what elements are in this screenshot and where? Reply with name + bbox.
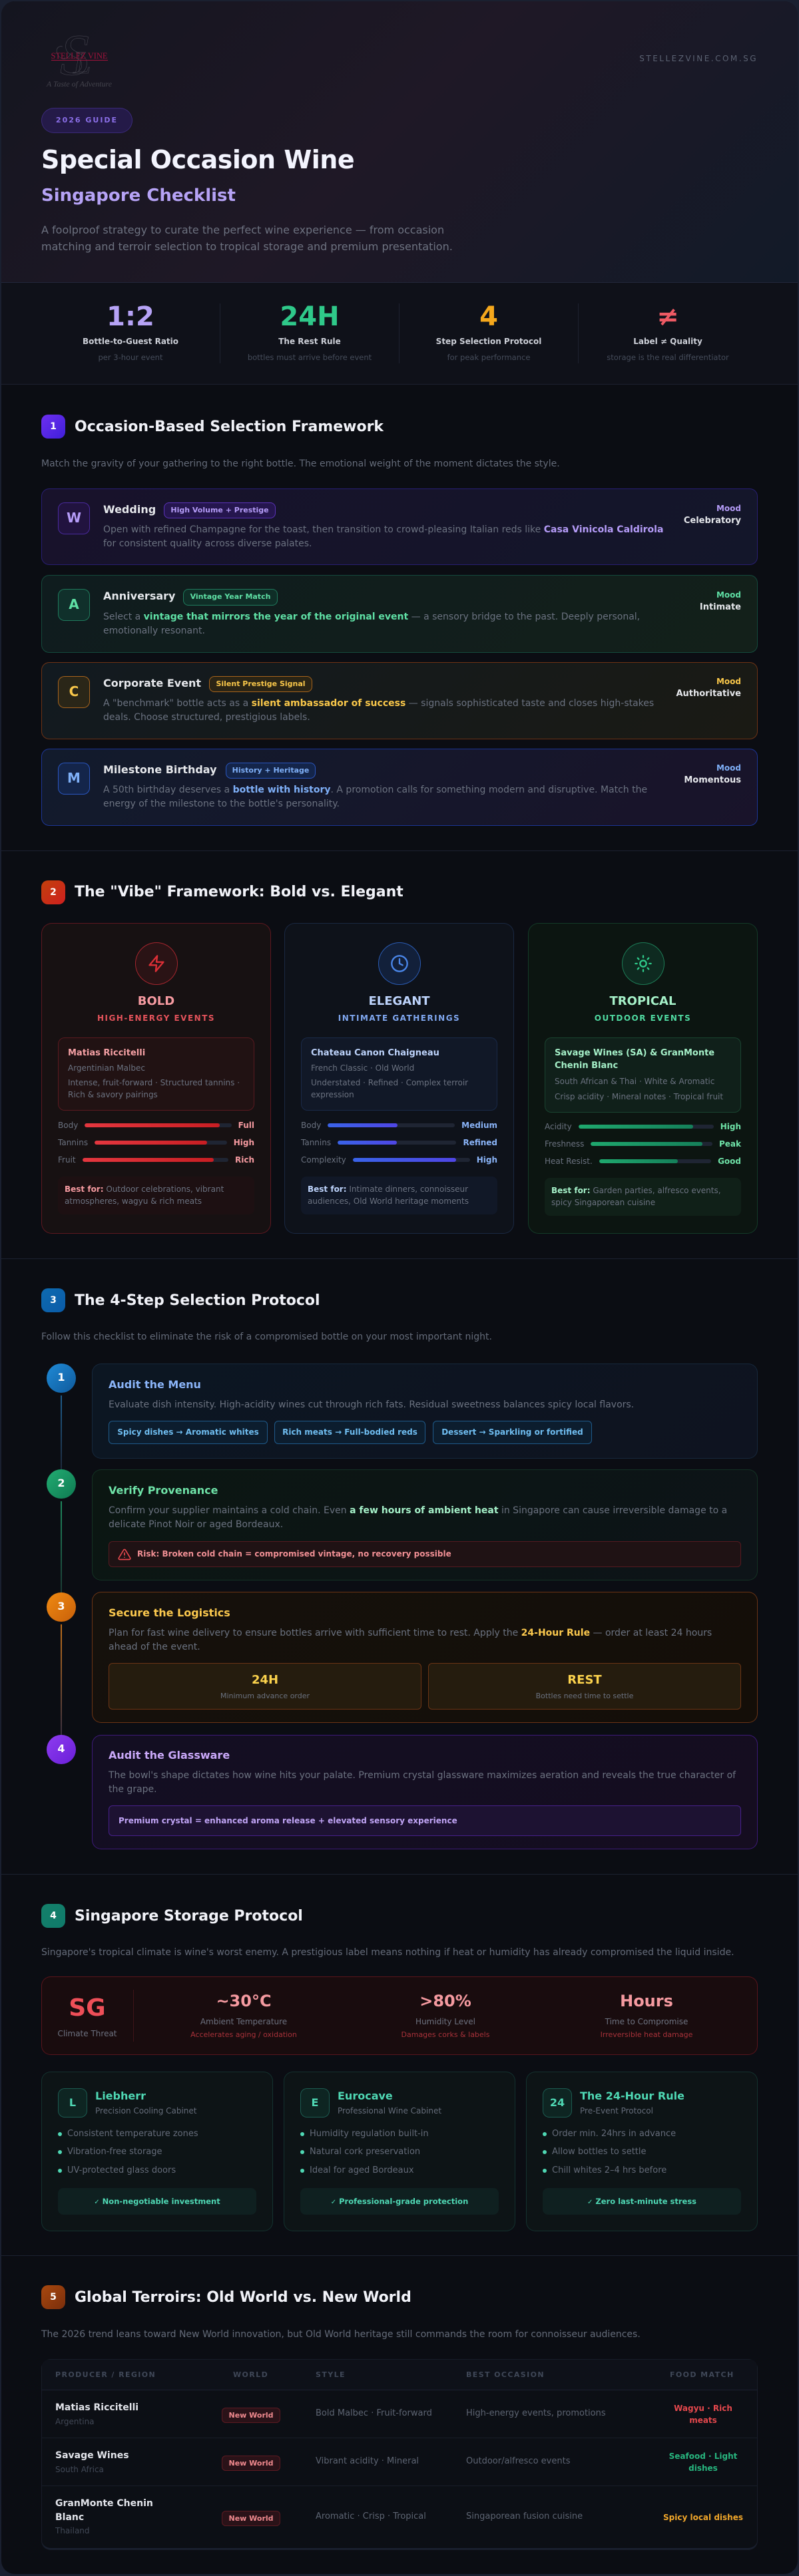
threat: temperature: Ambient Temperature: [200, 2017, 287, 2026]
meter: tannins: Refined: [463, 1138, 497, 1147]
glassware callout: [109, 1805, 741, 1836]
step 2: verify provenance: Verify Provenance: [109, 1484, 218, 1497]
section 5 badge: 5: [50, 2292, 57, 2302]
meter: complexity: Complexity: [301, 1155, 346, 1165]
meter: fruit: Rich: [235, 1155, 254, 1165]
threat: time: [601, 1992, 692, 2039]
best for: Best for: Garden parties, alfresco events,: [551, 1186, 721, 1195]
mood: Celebratory: [684, 516, 741, 526]
stat box: rest: [428, 1663, 741, 1710]
icon: L: [58, 2088, 87, 2117]
title: Special Occasion Wine: [41, 145, 354, 174]
step 3: secure the logistics: Plan for fast wine delivery to ensure bottles arrive with sufficient time to rest. Apply the 24-Hour Rule — order at least 24 hours: [109, 1628, 712, 1638]
table header: FOOD MATCH: [670, 2370, 734, 2379]
mood: Intimate: [700, 602, 741, 612]
row: Matias Riccitelli: Wagyu · Rich: [674, 2404, 732, 2413]
stat box: 24H: 24H: [252, 1673, 278, 1687]
description: deals. Choose structured, prestigious labels.: [103, 712, 310, 723]
storage card: 24-hour rule: Pre-Event Protocol: [580, 2106, 653, 2116]
storage card: 24-hour rule: [526, 2072, 758, 2231]
best for: spicy Singaporean cuisine: [551, 1198, 655, 1207]
section 2 heading: The "Vibe" Framework: Bold vs. Elegant: [75, 884, 403, 900]
table header: BEST OCCASION: [466, 2370, 545, 2379]
storage card: 24-hour rule: Chill whites 2–4 hrs before: [552, 2165, 666, 2175]
storage card: liebherr: Consistent temperature zones: [67, 2129, 198, 2139]
climate label: Climate Threat: [57, 2029, 117, 2038]
step 1: audit the menu: Evaluate dish intensity. High-acidity wines cut through rich fats. Residual sweetness balances spicy local flavors.: [109, 1399, 634, 1410]
description: A 50th birthday deserves a bottle with history. A promotion calls for something modern and disruptive. Match the: [103, 785, 647, 795]
occasion card: milestone: [41, 749, 758, 826]
meter: tannins: Tannins: [58, 1138, 88, 1147]
stat: rest rule: bottles must arrive before event: [248, 353, 372, 362]
stat: ratio: [83, 301, 178, 362]
description: matching and terroir selection to tropical storage and premium presentation.: [41, 240, 453, 253]
producer box: French Classic · Old World: [311, 1063, 414, 1073]
card title: Corporate Event: [103, 677, 201, 689]
best for: atmospheres, wagyu & rich meats: [65, 1196, 202, 1206]
icon: clock: [378, 942, 421, 985]
stats bar: [1, 282, 798, 385]
threat: humidity: [401, 1992, 489, 2039]
brand logo: A Taste of Adventure: [46, 79, 113, 89]
section 2 badge: [41, 880, 65, 904]
mood: [676, 677, 741, 699]
stat: label vs quality: storage is the real differentiator: [607, 353, 729, 362]
step 1: audit the menu: Audit the Menu: [109, 1378, 201, 1391]
meter: freshness: Peak: [719, 1139, 741, 1149]
description: Select a vintage that mirrors the year of the original event — a sensory bridge to the past. Deeply personal,: [103, 612, 640, 622]
row: GranMonte Chenin Blanc: Blanc: [55, 2512, 84, 2523]
producer box: Understated · Refined · Complex terroir: [311, 1078, 468, 1087]
climate label: [57, 1994, 117, 2038]
storage card: eurocave: Natural cork preservation: [310, 2147, 420, 2157]
producer box: Chenin Blanc: [555, 1061, 618, 1071]
mood: Mood: [716, 763, 741, 773]
row: GranMonte Chenin Blanc: Thailand: [55, 2526, 90, 2535]
meter: tannins: High: [234, 1138, 254, 1147]
occasion card: corporate: [41, 662, 758, 739]
vibe subtitle: HIGH-ENERGY EVENTS: [97, 1013, 215, 1023]
producer box: Crisp acidity · Mineral notes · Tropical fruit: [555, 1092, 723, 1101]
icon: M: M: [67, 770, 81, 786]
meter: freshness: Freshness: [545, 1139, 584, 1149]
best for: [58, 1177, 254, 1214]
row: Savage Wines: New World: [228, 2459, 274, 2468]
description: [103, 785, 647, 809]
threat: temperature: [190, 1992, 297, 2039]
table header: [41, 2359, 758, 2390]
section 4 badge: [41, 1904, 65, 1928]
icon: W: W: [67, 510, 81, 526]
section 3 badge: [41, 1288, 65, 1312]
pairing chip: Spicy dishes → Aromatic whites: [117, 1427, 259, 1437]
storage card: 24-hour rule: Order min. 24hrs in advance: [552, 2129, 676, 2139]
card footer: [543, 2188, 741, 2215]
meter: tannins: [301, 1138, 497, 1147]
section 4 badge: 4: [50, 1911, 57, 1921]
guide pill: 2026 GUIDE: [56, 116, 118, 124]
climate threat panel: [41, 1976, 758, 2055]
row: GranMonte Chenin Blanc: GranMonte Chenin: [55, 2498, 153, 2509]
storage card: eurocave: Professional Wine Cabinet: [338, 2106, 441, 2116]
description: [103, 524, 663, 549]
step 4: audit the glassware: Audit the Glassware: [109, 1749, 230, 1761]
row: Savage Wines: South Africa: [55, 2465, 104, 2474]
meter: heat resist: [545, 1157, 741, 1166]
card title: Wedding: [103, 503, 156, 516]
stat: step protocol: [436, 301, 541, 362]
card title: Anniversary: [103, 590, 175, 602]
storage card: liebherr: Precision Cooling Cabinet: [95, 2106, 197, 2116]
card footer: ✓ Professional-grade protection: [331, 2197, 468, 2206]
brand logo: STELLEZ VINE: [51, 51, 108, 61]
producer box: Savage Wines (SA) & GranMonte: [555, 1048, 714, 1058]
icon: lightning: [135, 942, 178, 985]
producer box: Rich & savory pairings: [68, 1090, 158, 1099]
meter: acidity: [545, 1122, 741, 1131]
table header: STYLE: [316, 2370, 346, 2379]
best for: audiences, Old World heritage moments: [308, 1196, 469, 1206]
meter: heat resist: Heat Resist.: [545, 1157, 593, 1166]
producer box: Chateau Canon Chaigneau: [311, 1048, 439, 1058]
icon: A: [58, 589, 90, 621]
row: Matias Riccitelli: Matias Riccitelli: [55, 2402, 138, 2413]
climate label: SG: [69, 1994, 106, 2022]
risk callout: Risk: Broken cold chain = compromised vintage, no recovery possible: [137, 1549, 451, 1559]
description: [103, 698, 654, 723]
step 2: verify provenance: delicate Pinot Noir or aged Bordeaux.: [109, 1519, 283, 1530]
stat: rest rule: 24H: [280, 301, 340, 332]
stat: label vs quality: ≠: [657, 301, 679, 332]
guide pill: [41, 108, 133, 133]
terroir table: [41, 2359, 758, 2550]
mood: [684, 763, 741, 785]
risk callout: [109, 1541, 741, 1567]
step marker 4: [47, 1735, 76, 1764]
description: Open with refined Champagne for the toast, then transition to crowd-pleasing Italian reds like Casa Vinicola Caldirola: [103, 524, 663, 535]
mood: [684, 504, 741, 526]
producer box: Matias Riccitelli: [68, 1048, 145, 1058]
step marker 3: 3: [57, 1600, 65, 1612]
mood: Mood: [716, 590, 741, 600]
icon: L: L: [69, 2096, 76, 2109]
section 5 intro: The 2026 trend leans toward New World innovation, but Old World heritage still commands the room for connoisseur audiences.: [41, 2329, 641, 2340]
step marker 2: [47, 1469, 76, 1499]
storage card: 24-hour rule: The 24-Hour Rule: [580, 2090, 684, 2102]
step 3: secure the logistics: [92, 1592, 758, 1723]
meter: body: Body: [301, 1121, 321, 1130]
pairing chip: [274, 1421, 425, 1444]
pairing chip: [109, 1421, 268, 1444]
meter: fruit: Fruit: [58, 1155, 76, 1165]
producer box: South African & Thai · White & Aromatic: [555, 1077, 714, 1086]
best for: Best for: Outdoor celebrations, vibrant: [65, 1185, 224, 1194]
storage card: liebherr: Vibration-free storage: [67, 2147, 162, 2157]
row: Matias Riccitelli: Argentina: [55, 2417, 95, 2426]
description: [41, 224, 453, 253]
stat box: rest: Bottles need time to settle: [536, 1692, 633, 1700]
tag: [226, 763, 316, 779]
producer box: Intense, fruit-forward · Structured tannins ·: [68, 1078, 240, 1087]
glassware callout: Premium crystal = enhanced aroma release + elevated sensory experience: [119, 1816, 457, 1825]
threat: time: Irreversible heat damage: [601, 2030, 692, 2039]
icon: 24: 24: [550, 2096, 565, 2109]
storage card: liebherr: Liebherr: [95, 2090, 146, 2102]
best for: [545, 1178, 741, 1216]
section 1 intro: Match the gravity of your gathering to the right bottle. The emotional weight of the moment dictates the style.: [41, 459, 560, 469]
card footer: [58, 2188, 256, 2215]
row: Matias Riccitelli: meats: [689, 2416, 717, 2425]
threat: humidity: Humidity Level: [415, 2017, 475, 2026]
row: GranMonte Chenin Blanc: Spicy local dishes: [663, 2513, 743, 2522]
producer box: Argentinian Malbec: [68, 1063, 145, 1073]
tag: [183, 589, 278, 606]
vibe name: TROPICAL: [610, 994, 676, 1008]
occasion card: wedding: [41, 488, 758, 565]
step marker 4: 4: [57, 1742, 65, 1755]
icon: 24: [543, 2088, 572, 2117]
stat: label vs quality: Label ≠ Quality: [633, 337, 702, 346]
row: GranMonte Chenin Blanc: New World: [228, 2514, 274, 2523]
tag: High Volume + Prestige: [170, 506, 269, 514]
step 2: verify provenance: [92, 1469, 758, 1580]
producer box: expression: [311, 1090, 354, 1099]
meter: complexity: High: [477, 1155, 497, 1165]
description: energy of the milestone to the bottle's personality.: [103, 799, 340, 809]
stat: rest rule: The Rest Rule: [278, 337, 341, 346]
vibe subtitle: OUTDOOR EVENTS: [595, 1013, 691, 1023]
row: Savage Wines: [42, 2450, 757, 2486]
storage card: eurocave: [284, 2072, 515, 2231]
icon: W: [58, 502, 90, 534]
step 3: secure the logistics: ahead of the event.: [109, 1642, 200, 1652]
row: GranMonte Chenin Blanc: Aromatic · Crisp · Tropical: [316, 2511, 426, 2521]
section 1 badge: 1: [50, 421, 57, 432]
icon: C: C: [69, 683, 79, 699]
icon: E: [300, 2088, 330, 2117]
brand logo: L: [73, 45, 91, 81]
header banner: [1, 1, 798, 282]
section 3 badge: 3: [50, 1295, 57, 1306]
row: Savage Wines: Seafood · Light: [669, 2452, 737, 2461]
row: Savage Wines: dishes: [688, 2464, 718, 2473]
icon: M: [58, 763, 90, 795]
description: for consistent quality across diverse palates.: [103, 538, 312, 549]
meter: body: Medium: [461, 1121, 497, 1130]
step marker 1: [47, 1364, 76, 1393]
subtitle: Singapore Checklist: [41, 186, 236, 206]
mood: Authoritative: [676, 689, 741, 699]
meter: freshness: [545, 1139, 742, 1149]
stat: label vs quality: [607, 301, 729, 362]
row: GranMonte Chenin Blanc: [55, 2498, 743, 2535]
tag: Vintage Year Match: [190, 592, 270, 601]
meter: tannins: Tannins: [301, 1138, 331, 1147]
stat: ratio: Bottle-to-Guest Ratio: [83, 337, 178, 346]
tag: [209, 676, 312, 692]
stat: ratio: 1:2: [107, 301, 154, 332]
section 5 heading: Global Terroirs: Old World vs. New World: [75, 2289, 411, 2306]
storage card: eurocave: Eurocave: [338, 2090, 393, 2102]
vibe card: elegant: [284, 923, 514, 1234]
row: Savage Wines: Savage Wines: [55, 2450, 129, 2461]
stat: step protocol: 4: [479, 301, 498, 332]
description: A foolproof strategy to curate the perfect wine experience — from occasion: [41, 224, 444, 236]
storage card: eurocave: Ideal for aged Bordeaux: [310, 2165, 414, 2175]
card footer: ✓ Non-negotiable investment: [94, 2197, 220, 2206]
card footer: [300, 2188, 499, 2215]
section 5 badge: [41, 2285, 65, 2309]
step 4: audit the glassware: [92, 1735, 758, 1849]
mood: Mood: [716, 677, 741, 686]
vibe card: tropical: [528, 923, 758, 1234]
description: A "benchmark" bottle acts as a silent ambassador of success — signals sophisticated taste and closes high-stakes: [103, 698, 654, 709]
brand logo: [46, 27, 113, 89]
producer box: [58, 1037, 254, 1111]
meter: tannins: [57, 1138, 254, 1147]
meter: acidity: High: [720, 1122, 741, 1131]
icon: C: [58, 676, 90, 708]
step 1: audit the menu: [92, 1364, 758, 1459]
step 3: secure the logistics: Secure the Logistics: [109, 1606, 230, 1619]
meter: body: [301, 1121, 497, 1130]
section 4 heading: Singapore Storage Protocol: [75, 1908, 303, 1925]
meter: fruit: [58, 1155, 254, 1165]
stat: step protocol: Step Selection Protocol: [436, 337, 541, 346]
meter: acidity: Acidity: [545, 1122, 572, 1131]
storage card: liebherr: [41, 2072, 273, 2231]
stat box: rest: REST: [567, 1673, 602, 1687]
row: Matias Riccitelli: New World: [228, 2411, 274, 2420]
tag: History + Heritage: [232, 766, 309, 775]
icon: warning: [118, 1549, 131, 1560]
step marker 3: [47, 1592, 76, 1622]
producer box: [301, 1037, 497, 1111]
step 4: audit the glassware: the grape.: [109, 1784, 157, 1795]
section 1 badge: [41, 415, 65, 439]
threat: temperature: Accelerates aging / oxidation: [190, 2030, 297, 2039]
website: STELLEZVINE.COM.SG: [639, 54, 758, 63]
meter: heat resist: Good: [718, 1157, 741, 1166]
mood: Momentous: [684, 775, 741, 785]
section 3 heading: The 4-Step Selection Protocol: [75, 1292, 320, 1309]
occasion card: anniversary: [41, 575, 758, 653]
section 4 intro: Singapore's tropical climate is wine's worst enemy. A prestigious label means nothing if heat or humidity has already compromised the liquid inside.: [41, 1947, 734, 1958]
stat: step protocol: for peak performance: [447, 353, 530, 362]
storage card: liebherr: UV-protected glass doors: [67, 2165, 176, 2175]
step marker 2: 2: [57, 1477, 65, 1489]
threat: time: Time to Compromise: [605, 2017, 688, 2026]
pairing chip: Rich meats → Full-bodied reds: [282, 1427, 417, 1437]
threat: time: Hours: [620, 1992, 673, 2010]
card title: Milestone Birthday: [103, 763, 217, 776]
stat: rest rule: [248, 301, 372, 362]
step marker 1: 1: [57, 1371, 65, 1383]
vibe card: bold: [41, 923, 271, 1234]
tag: Silent Prestige Signal: [216, 679, 306, 688]
step 2: verify provenance: Confirm your supplier maintains a cold chain. Even a few hours of ambient heat in Singapore can cause irreversible damage to a: [109, 1505, 727, 1516]
description: [103, 612, 640, 636]
pairing chip: Dessert → Sparkling or fortified: [441, 1427, 583, 1437]
description: emotionally resonant.: [103, 626, 205, 636]
section 1 heading: Occasion-Based Selection Framework: [75, 419, 384, 435]
meter: body: Full: [238, 1121, 254, 1130]
producer box: [545, 1037, 741, 1113]
section 2 badge: 2: [50, 887, 57, 898]
icon: sun: [622, 942, 665, 985]
best for: Best for: Intimate dinners, connoisseur: [308, 1185, 468, 1194]
row: Matias Riccitelli: High-energy events, promotions: [466, 2408, 606, 2418]
threat: temperature: ~30°C: [216, 1992, 272, 2010]
step 4: audit the glassware: The bowl's shape dictates how wine hits your palate. Premium crystal glassware maximizes aeration and reveals the true character of: [109, 1770, 736, 1781]
row: Savage Wines: Outdoor/alfresco events: [466, 2456, 570, 2466]
stat box: 24H: [109, 1663, 421, 1710]
section 3 intro: Follow this checklist to eliminate the risk of a compromised bottle on your most important night.: [41, 1332, 492, 1342]
stat: ratio: per 3-hour event: [99, 353, 162, 362]
pairing chip: [433, 1421, 592, 1444]
storage card: eurocave: Humidity regulation built-in: [310, 2129, 429, 2139]
mood: [700, 590, 741, 612]
tag: [164, 502, 276, 518]
icon: E: E: [312, 2096, 318, 2109]
row: Matias Riccitelli: [42, 2402, 757, 2438]
icon: A: A: [69, 596, 79, 612]
row: GranMonte Chenin Blanc: Singaporean fusion cuisine: [466, 2511, 583, 2521]
vibe name: BOLD: [138, 994, 174, 1008]
table header: WORLD: [233, 2370, 268, 2379]
meter: body: [58, 1121, 254, 1130]
threat: humidity: >80%: [419, 1992, 471, 2010]
row: Matias Riccitelli: Bold Malbec · Fruit-forward: [316, 2408, 432, 2418]
row: Savage Wines: Vibrant acidity · Mineral: [316, 2456, 419, 2466]
storage card: 24-hour rule: Allow bottles to settle: [552, 2147, 647, 2157]
threat: humidity: Damages corks & labels: [401, 2030, 489, 2039]
mood: Mood: [716, 504, 741, 513]
meter: body: Body: [58, 1121, 78, 1130]
table header: PRODUCER / REGION: [55, 2370, 156, 2379]
card footer: ✓ Zero last-minute stress: [587, 2197, 696, 2206]
vibe name: ELEGANT: [368, 994, 430, 1008]
vibe subtitle: INTIMATE GATHERINGS: [338, 1013, 460, 1023]
meter: complexity: [301, 1155, 497, 1165]
best for: [301, 1177, 497, 1214]
stat box: 24H: Minimum advance order: [220, 1692, 310, 1700]
